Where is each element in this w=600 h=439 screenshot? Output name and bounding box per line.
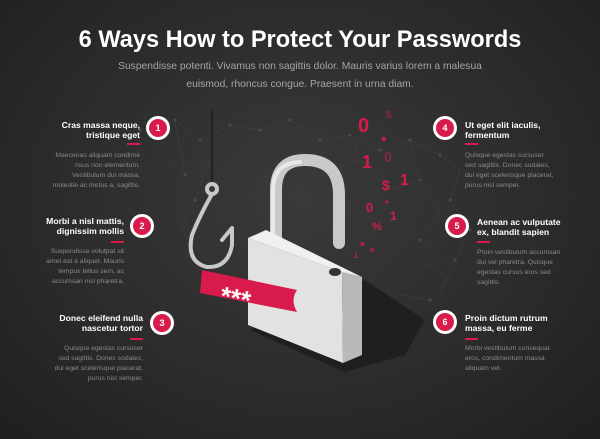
item 6: Proin dictum rutrum — [465, 313, 548, 323]
item 1: Maecenas aliquam condime risus non elementum. Vestibulum dui massa, molestie ac metus a, sagittis. — [53, 152, 140, 189]
badge 1: 1 — [155, 123, 160, 133]
floating characters: 1 — [354, 253, 358, 260]
item 3 — [54, 313, 144, 382]
badge 4: 4 — [442, 123, 448, 133]
item 2: dignissim mollis — [57, 226, 124, 236]
item 4 — [465, 120, 553, 189]
floating characters: $ — [382, 177, 390, 193]
badge 1 — [146, 116, 170, 140]
badge 6 — [433, 310, 457, 334]
floating characters: 0 — [366, 200, 373, 215]
item 1 — [53, 120, 140, 189]
shackle — [273, 160, 339, 243]
floating characters: * — [381, 133, 387, 149]
password tag — [200, 270, 297, 316]
item 1: Cras massa neque, — [62, 120, 140, 130]
badge 2: 2 — [139, 221, 144, 231]
floating characters: % — [372, 221, 382, 233]
floating characters: 0 — [384, 149, 392, 165]
floating characters: s — [370, 245, 375, 254]
shadow — [250, 280, 425, 372]
item 4: fermentum — [465, 130, 509, 140]
lock body — [248, 230, 362, 363]
item 6: Morbi vestibulum consequat eros, condimentum massa aliquam vel. — [465, 345, 550, 372]
floating characters: * — [360, 239, 365, 253]
subtitle — [118, 61, 482, 90]
item 5: Aenean ac vulputate — [477, 217, 561, 227]
floating characters — [354, 110, 409, 260]
item 1: tristique eget — [86, 130, 140, 140]
item 4: Quisque egestas cursuser sed sagittis. Donec sodales, dui eget scelerisque placerat, purus nisl semper. — [465, 152, 553, 189]
floating characters: * — [385, 199, 389, 210]
item 2 — [46, 216, 124, 285]
item 6: massa, eu ferme — [465, 323, 532, 333]
badge 2 — [130, 214, 154, 238]
floating characters: 1 — [390, 209, 397, 223]
floating characters: 1 — [400, 172, 409, 189]
badge 4 — [433, 116, 457, 140]
badge 5 — [445, 214, 469, 238]
item 5: Proin vestibulum accumsan dui vel pharetra. Quisque egestas cursus eros sed sagittis. — [477, 249, 560, 286]
floating characters: 1 — [362, 152, 372, 172]
floating characters: $ — [386, 110, 392, 121]
item 5: ex, blandit sapien — [477, 227, 549, 237]
badge 3 — [150, 311, 174, 335]
badge 5: 5 — [454, 221, 460, 231]
item 3: Quisque egestas cursuser sed sagittis. Donec sodales, dui eget scelerisque placerat, purus nisl semper. — [55, 345, 143, 382]
badge 6: 6 — [442, 317, 448, 327]
badge 3: 3 — [159, 318, 164, 328]
item 2: Suspendisse volutpat sit amet est a aliquet. Mauris tempus tellus sem, ac accumsan nisl pharetra. — [46, 248, 124, 285]
subtitle: euismod, rhoncus congue. Praesent in urna diam. — [186, 79, 414, 90]
password tag: *** — [218, 280, 254, 316]
subtitle: Suspendisse potenti. Vivamus non sagittis dolor. Mauris varius lorem a malesua — [118, 61, 482, 72]
item 6 — [465, 313, 550, 372]
item 3: nascetur tortor — [82, 323, 143, 333]
floating characters: 0 — [358, 115, 369, 137]
item 3: Donec eleifend nulla — [59, 313, 143, 323]
title: 6 Ways How to Protect Your Passwords — [79, 27, 521, 53]
hook — [191, 110, 232, 267]
item 5 — [477, 217, 561, 286]
item 2: Morbi a nisl mattis, — [46, 216, 124, 226]
item 4: Ut eget elit iaculis, — [465, 120, 540, 130]
